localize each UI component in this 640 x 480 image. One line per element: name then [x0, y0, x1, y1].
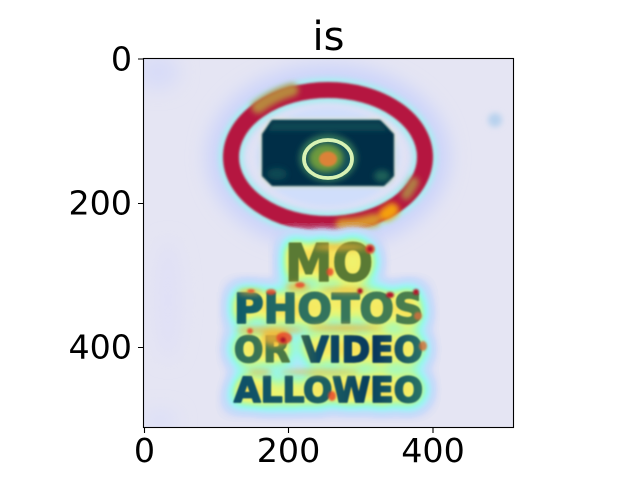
axes frame — [144, 58, 514, 428]
y axis: ticks and labels: 400 — [68, 328, 132, 366]
icon: red prohibition ring — [231, 90, 425, 225]
title: is — [313, 14, 344, 60]
text block: sign wording — [234, 234, 423, 411]
icon: camera lens — [299, 134, 357, 182]
panel: image heatmap — [136, 54, 514, 430]
icon: glow around prohibition ring — [224, 82, 432, 232]
icon: camera body — [262, 120, 394, 186]
x axis: ticks and labels: 400 — [401, 431, 465, 470]
text block: sign wording: OR VIDEO — [234, 330, 423, 371]
y axis: ticks and labels: 0 — [111, 40, 132, 78]
ring colour variation — [258, 90, 414, 225]
text block: sign wording: MO — [285, 234, 373, 294]
chart: saliency heatmap figure — [70, 20, 514, 462]
camera top band — [268, 122, 388, 131]
x axis: ticks and labels — [134, 428, 465, 470]
camera shading — [267, 168, 390, 182]
y axis: ticks and labels — [68, 40, 143, 366]
y axis: ticks and labels: 200 — [68, 184, 132, 222]
spot: blue blob top right — [488, 113, 502, 127]
x axis: ticks and labels: 200 — [257, 431, 320, 470]
text block: sign wording: PHOTOS — [234, 285, 423, 333]
x axis: ticks and labels: 0 — [134, 431, 155, 470]
text block: sign wording: ALLOWEO — [234, 371, 423, 411]
heat: hot spots over text — [236, 244, 427, 401]
background mottling — [144, 60, 174, 86]
